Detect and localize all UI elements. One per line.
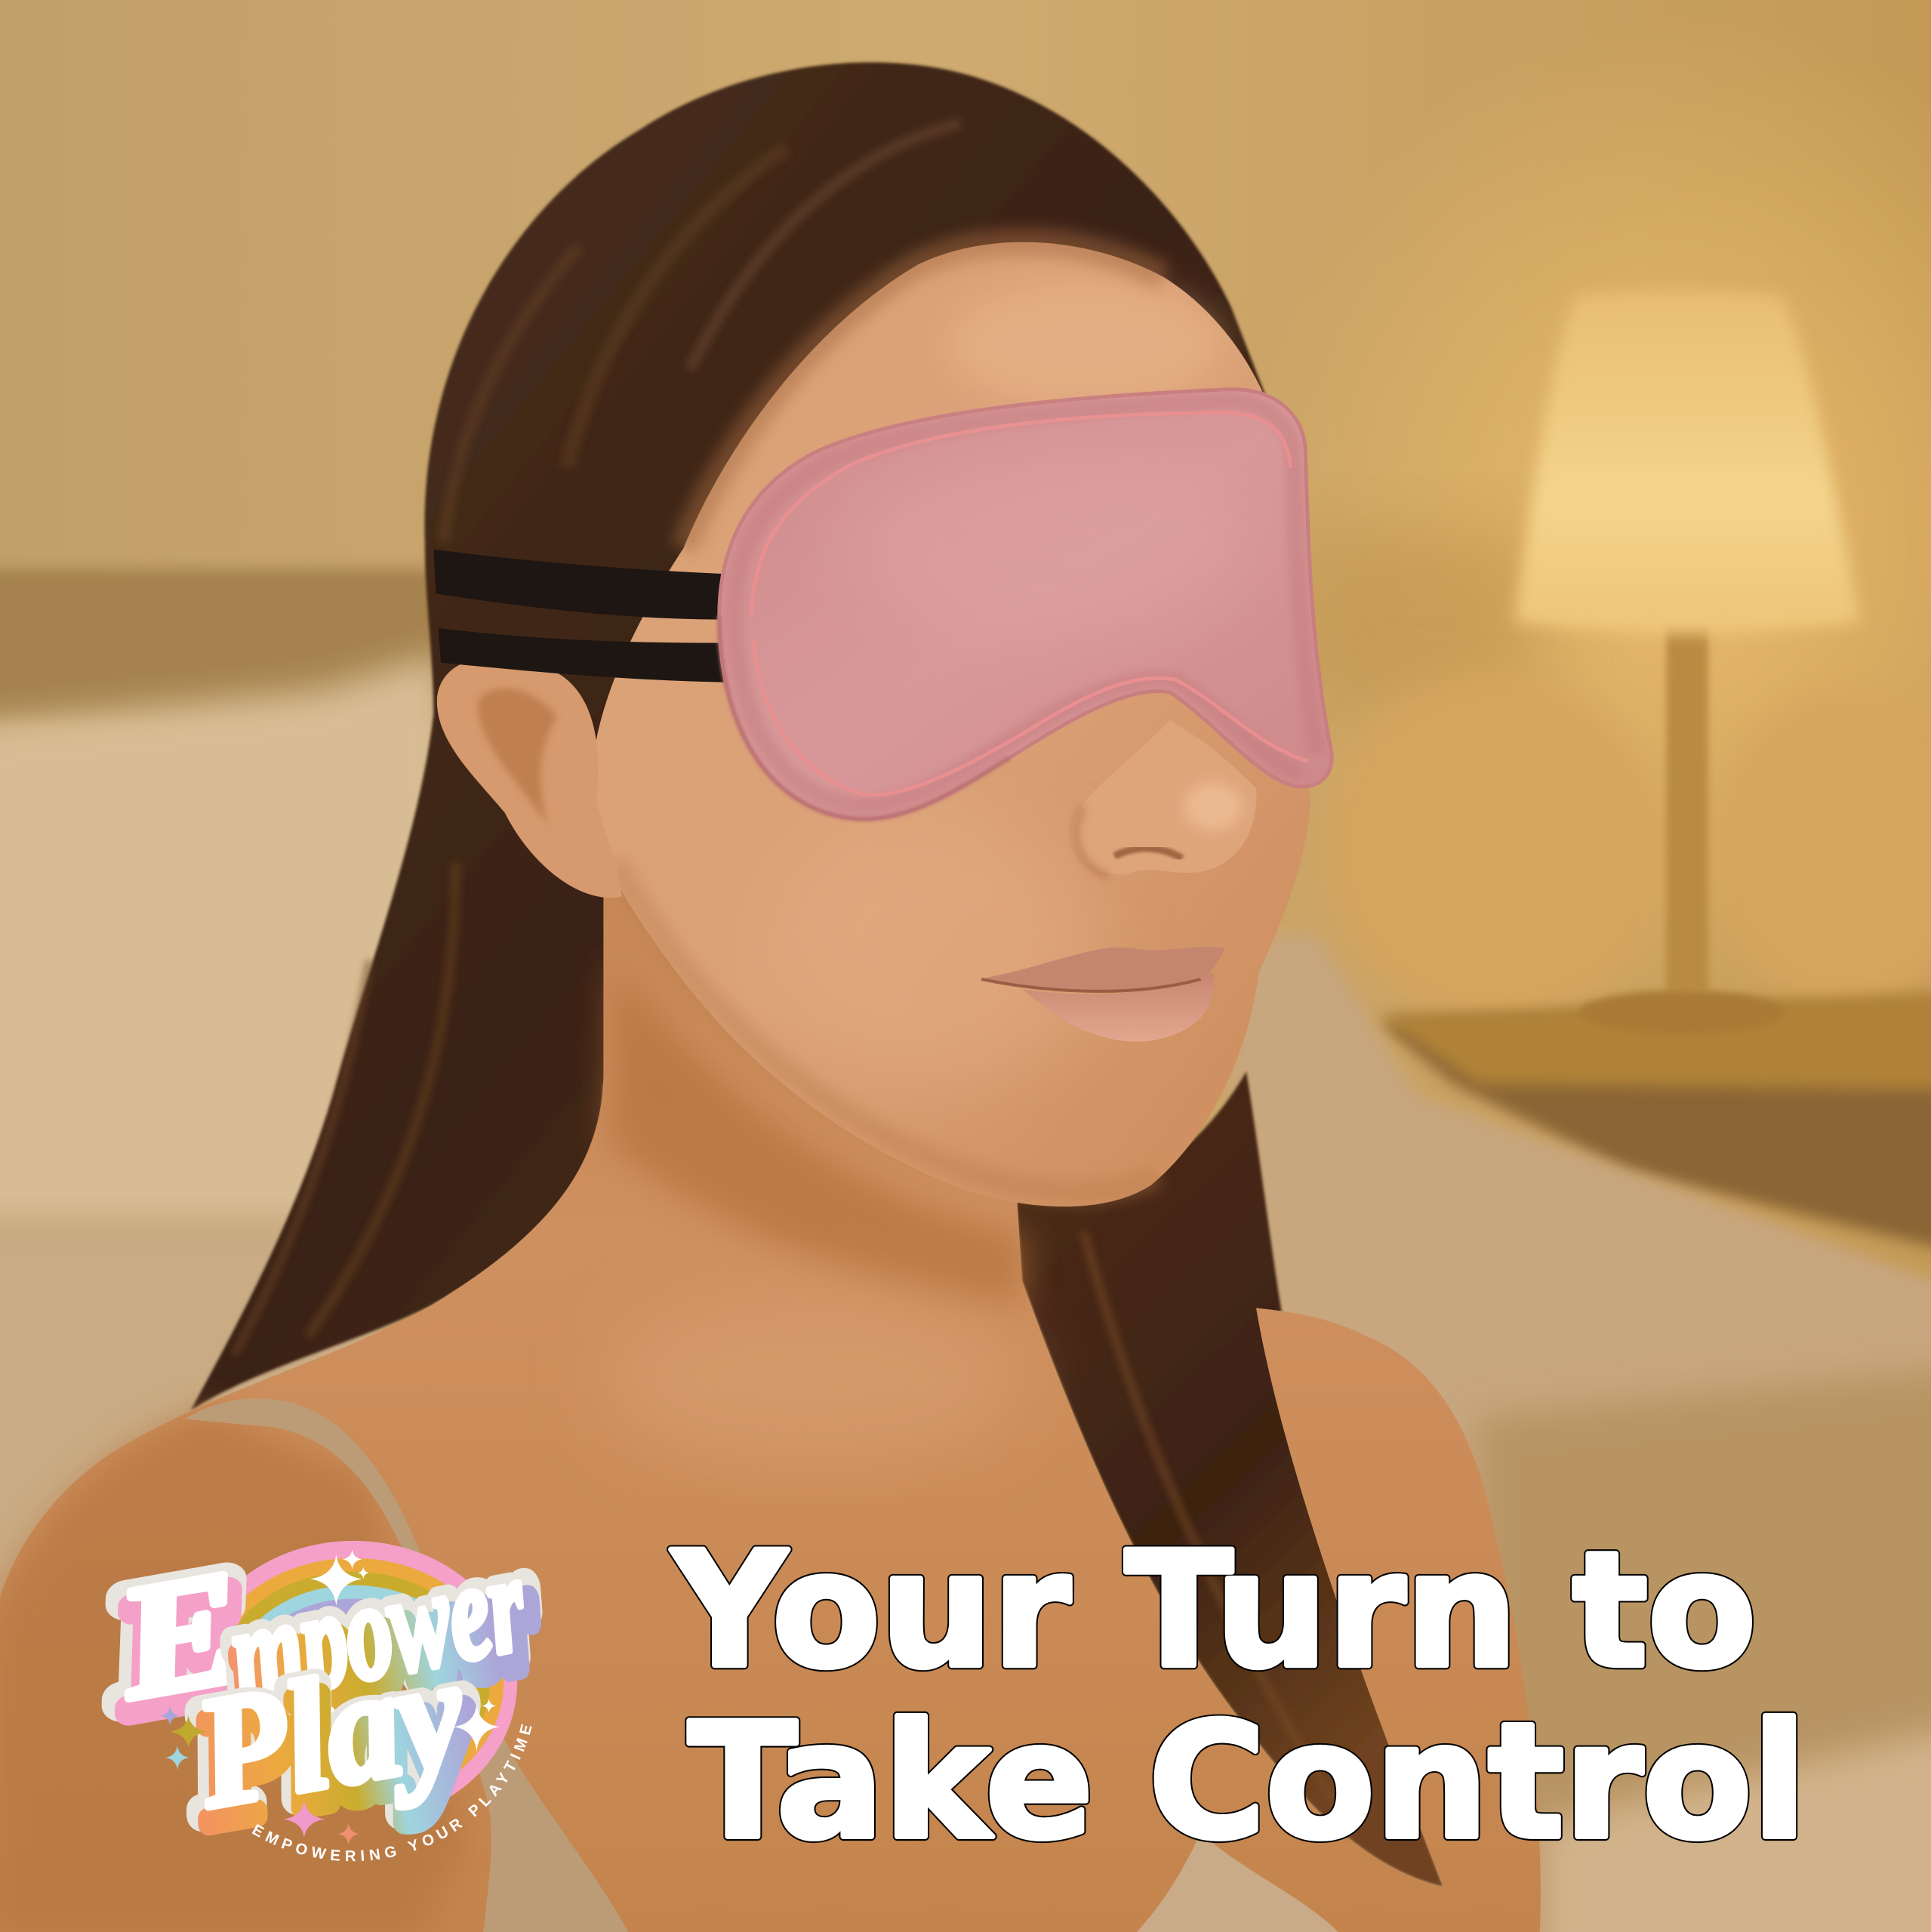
- letters mpower: mpower: [221, 1541, 549, 1749]
- sparkles: [160, 1549, 500, 1845]
- lamp base: [1578, 991, 1785, 1034]
- mask sheen: [837, 443, 1256, 640]
- tank top: [185, 1398, 1342, 1932]
- straps: [433, 550, 727, 683]
- bedding right: [1231, 936, 1931, 1932]
- pillow left: [0, 653, 493, 1231]
- rainbow arch: [236, 1540, 518, 1797]
- right hair lock: [1016, 1071, 1443, 1887]
- mask rim band: [734, 402, 1318, 806]
- lamp stem: [1666, 622, 1708, 991]
- lamp shade: [1515, 291, 1859, 634]
- Empower wordmark: [97, 1524, 549, 1750]
- lips: [979, 947, 1225, 1042]
- letter E: E: [104, 1536, 255, 1733]
- collarbone highlight: [603, 1293, 1022, 1465]
- headboard: [0, 569, 468, 723]
- mask stitching: [751, 413, 1308, 795]
- Play wordmark: Play: [183, 1623, 477, 1841]
- nightstand: [1379, 1004, 1931, 1256]
- hair back: [191, 63, 1274, 1410]
- letters mpower: mpower: [216, 1529, 547, 1738]
- letter E: E: [97, 1541, 259, 1739]
- right hair strands: [1084, 1231, 1355, 1835]
- face: [591, 242, 1310, 1206]
- headline line 2: Take Control: [688, 1689, 1806, 1874]
- logo: Empower Play: [97, 1525, 549, 1862]
- logo tagline: EMPOWERING YOUR PLAYTIME: [252, 1724, 531, 1862]
- background pillows right: [1324, 677, 1669, 1022]
- Play wordmark: Play: [177, 1630, 483, 1850]
- neck and chest: [0, 862, 1541, 1932]
- forehead highlight: [948, 283, 1219, 406]
- letter E: E: [104, 1551, 260, 1748]
- nose: [1072, 720, 1256, 877]
- bedding left: [0, 1219, 369, 1638]
- letters mpower: mpower: [217, 1525, 538, 1733]
- ear: [437, 657, 622, 898]
- cheek highlight: [776, 813, 1096, 1084]
- shoulder shading: [0, 1410, 468, 1932]
- neck shadow: [610, 960, 1022, 1305]
- headline line 1: Your Turn to: [670, 1518, 1756, 1703]
- headline: [670, 1518, 1806, 1874]
- hairline shadow: [683, 242, 1164, 548]
- sleep mask: [719, 390, 1332, 819]
- mask edge shadow: [719, 616, 1010, 819]
- Play wordmark: Play: [183, 1639, 485, 1859]
- lamp glow: [1244, 12, 1931, 1047]
- headline line 1: Your Turn to: [670, 1518, 1756, 1703]
- wall darker right band: [1293, 530, 1539, 714]
- letters mpower: [215, 1524, 549, 1750]
- woman with sleep mask: [0, 63, 1541, 1932]
- headline line 2: Take Control: [688, 1689, 1806, 1874]
- jaw shadow: [616, 862, 1157, 1192]
